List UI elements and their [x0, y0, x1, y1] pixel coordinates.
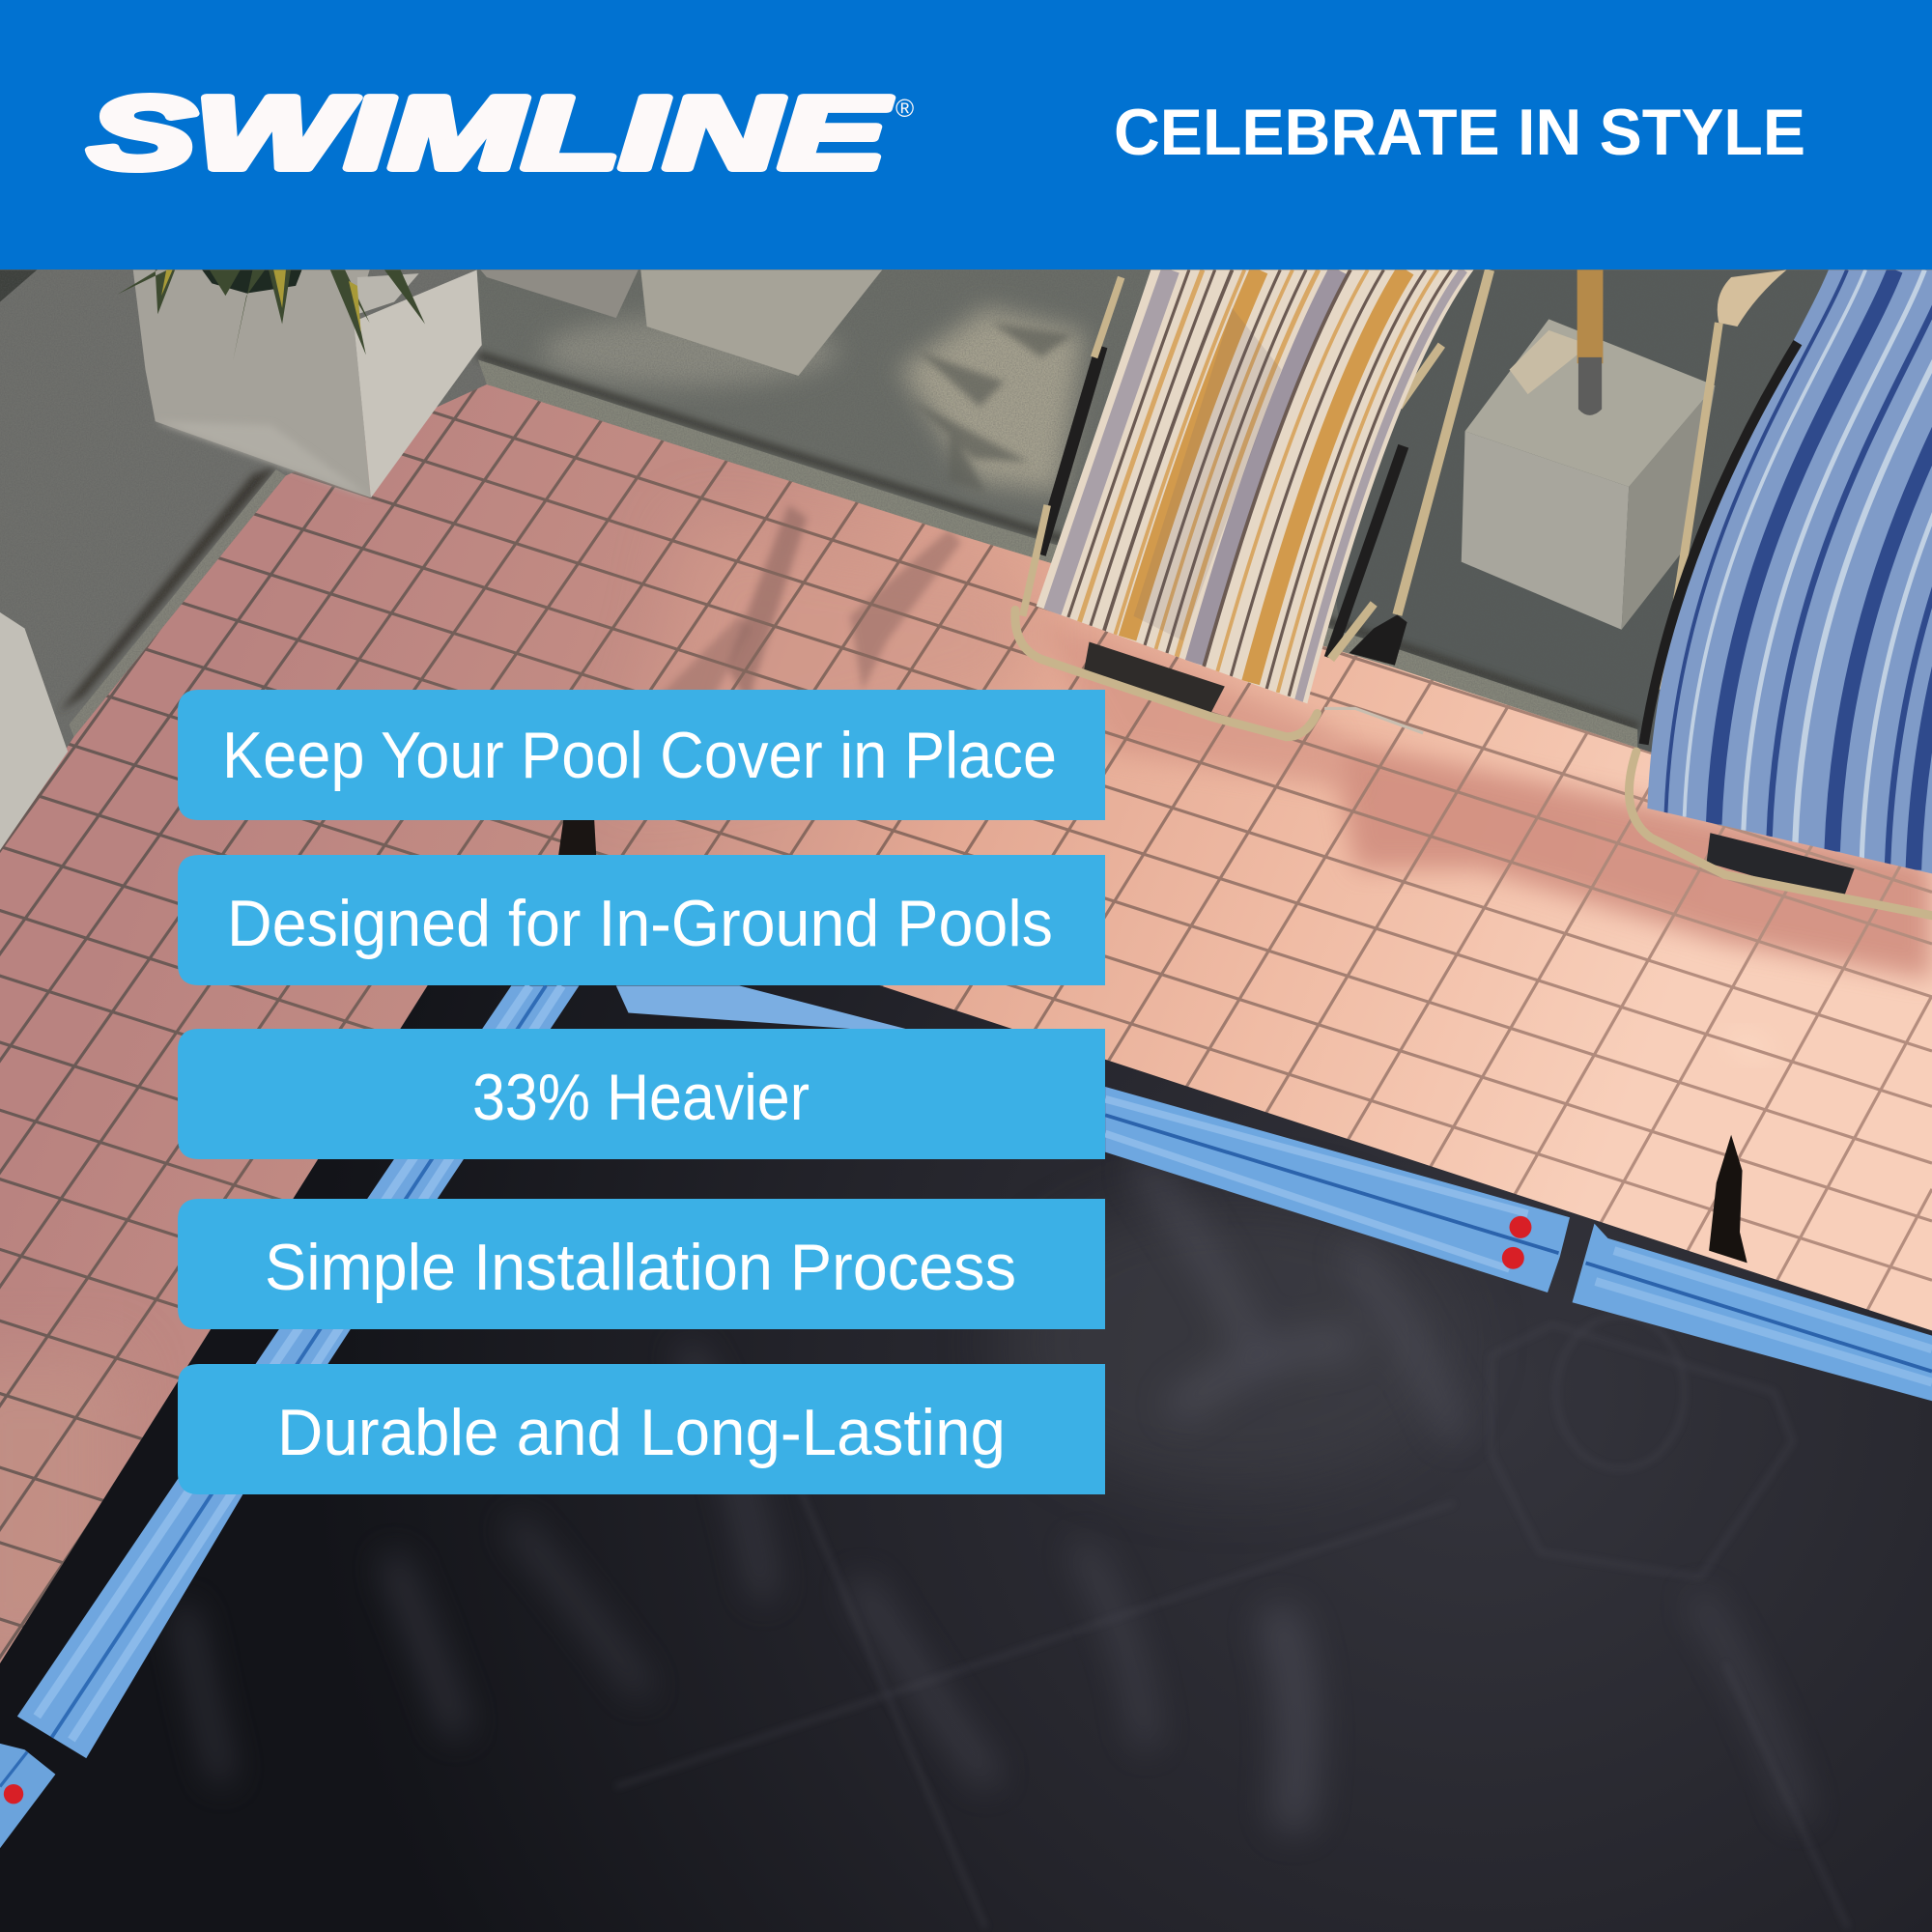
water tube: left side: [17, 985, 579, 1758]
stake behind callouts: [558, 813, 596, 858]
callout: simple installation: [178, 1199, 1105, 1329]
striped lounge chair: [1015, 270, 1490, 737]
stake between patio and cover: [1709, 1135, 1747, 1263]
water tube: far-right segment: [1573, 1224, 1932, 1401]
water tube: top segment: [616, 985, 906, 1029]
callout: in-ground pools: [178, 855, 1105, 985]
water tube: bottom-left corner with red cap: [0, 1744, 55, 1848]
callout: durable: Durable and Long-Lasting: [277, 1396, 1006, 1469]
umbrella base block: [1462, 270, 1716, 630]
palm shadow on concrete: [912, 323, 1072, 493]
callout: 33% heavier: [178, 1029, 1105, 1159]
red fill cap bottom: [1502, 1247, 1524, 1269]
header band: [0, 0, 1932, 270]
callout: in-ground pools: Designed for In-Ground Pools: [227, 887, 1053, 960]
blue striped lounge chair: [1629, 270, 1932, 916]
black winter pool cover: [0, 985, 1932, 1932]
callout: durable: [178, 1364, 1105, 1494]
red fill cap top: [1509, 1216, 1531, 1238]
callout: keep cover in place: Keep Your Pool Cover in Place: [222, 719, 1057, 792]
pink tile patio: [0, 384, 1932, 1663]
callout: simple installation: Simple Installation Process: [265, 1231, 1016, 1304]
water tube: right segment with red caps: [1105, 1087, 1570, 1293]
callout: keep cover in place: [178, 690, 1105, 820]
concrete blocks: [0, 270, 882, 850]
callout: 33% heavier: 33% Heavier: [472, 1061, 810, 1134]
logo: SWIMLINE wordmark: ®: [895, 94, 914, 123]
logo: SWIMLINE wordmark: [89, 76, 914, 190]
heading: celebrate in style: CELEBRATE IN STYLE: [1114, 96, 1805, 169]
logo: SWIMLINE wordmark: SWIMLINE: [89, 76, 891, 190]
planter with spiky plant: [117, 270, 482, 497]
